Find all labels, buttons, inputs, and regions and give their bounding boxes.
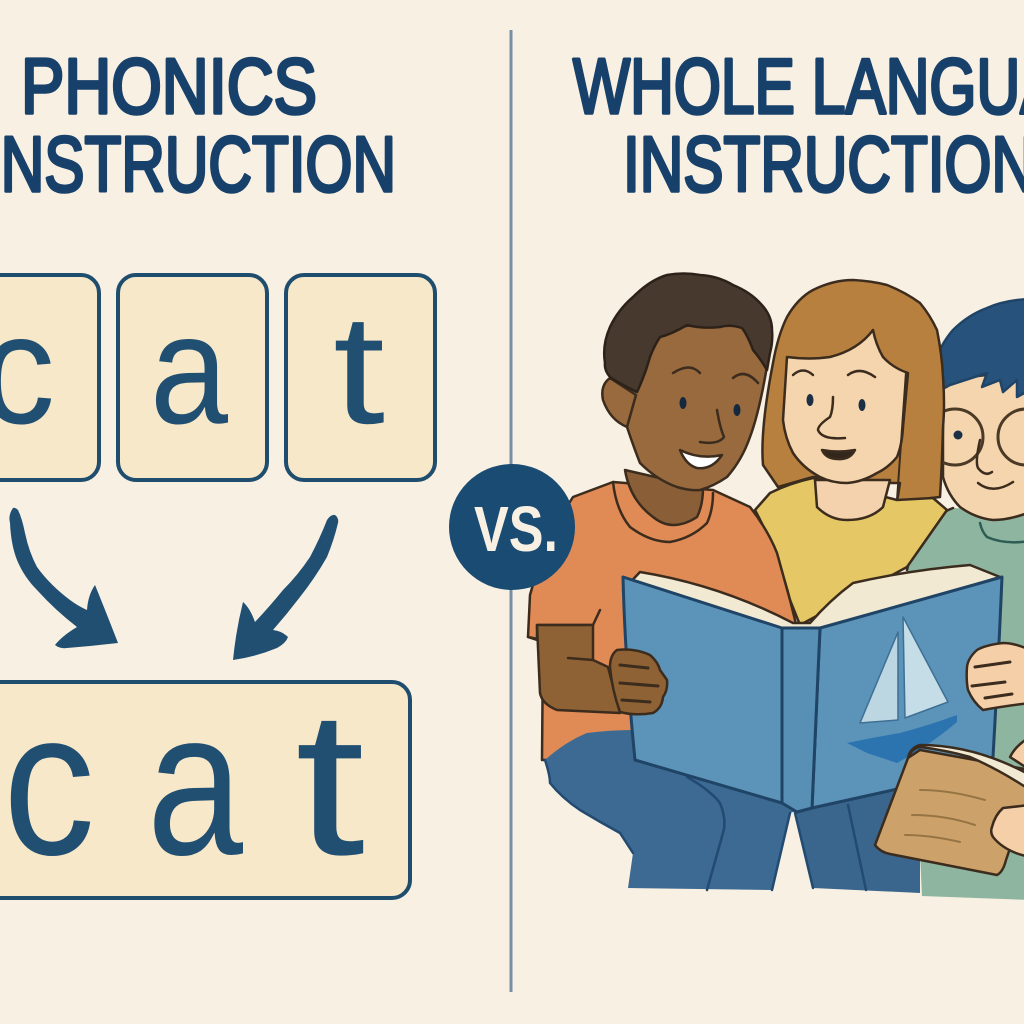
child: left with dark curly hair — [528, 274, 800, 760]
hand: left child's fingers on book — [610, 650, 667, 714]
letter tile: a — [118, 275, 267, 480]
arrow: right tile to word — [233, 515, 338, 660]
blended word tile: cat: a — [147, 668, 243, 898]
small tan book — [875, 737, 1024, 875]
heading: phonics instruction: PHONICS — [21, 42, 317, 130]
child: left jeans — [545, 730, 800, 890]
letter tile: t: t — [333, 283, 385, 457]
letter tile: c — [0, 275, 99, 480]
child: right with glasses — [907, 299, 1024, 900]
heading: phonics instruction — [0, 42, 396, 208]
blended word tile: cat — [0, 668, 410, 898]
arrow: left tile to word — [9, 508, 118, 648]
letter tile: t — [286, 275, 435, 480]
child: middle jeans — [795, 780, 920, 893]
blended word tile: cat: t — [295, 668, 365, 898]
blended word tile: cat: c — [3, 668, 95, 898]
badge: vs: VS. — [474, 493, 558, 565]
badge: vs — [449, 464, 575, 590]
heading: whole language instruction — [573, 42, 1024, 208]
hand: right child's fingers on book — [967, 643, 1024, 710]
child: middle with auburn hair — [755, 280, 947, 625]
illustration: three children reading — [528, 274, 1024, 900]
book: open blue book — [623, 565, 1002, 812]
letter tile: a: a — [150, 283, 228, 457]
